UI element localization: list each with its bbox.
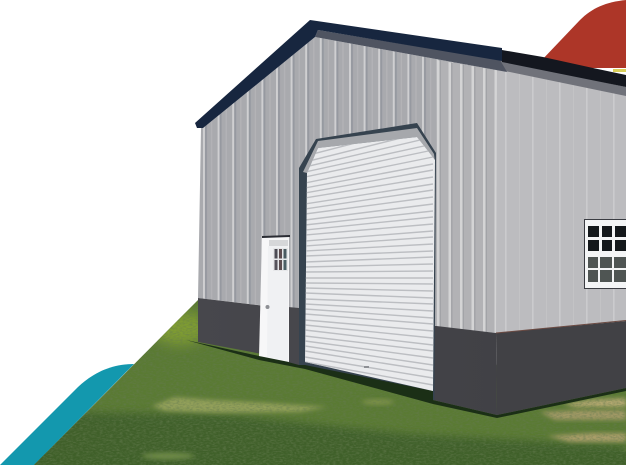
gable soffit shadow bbox=[315, 30, 507, 72]
eave black band bbox=[502, 50, 626, 87]
door transom bbox=[269, 240, 288, 246]
rolling door frame bbox=[299, 123, 436, 400]
foliage speck bbox=[613, 69, 626, 72]
upper sash panes bbox=[588, 226, 626, 251]
wainscot gable bbox=[198, 298, 497, 415]
building bbox=[195, 20, 626, 415]
lower sash panes bbox=[588, 257, 626, 282]
bright grass patch bbox=[152, 311, 208, 345]
red accent shape bbox=[540, 0, 626, 68]
door head shadow bbox=[262, 235, 290, 238]
door slats bbox=[305, 139, 433, 386]
shaded foreground bbox=[30, 412, 626, 465]
grass texture bbox=[30, 290, 626, 465]
door knob bbox=[266, 305, 270, 309]
ground shadow under building bbox=[186, 340, 626, 418]
bare ground patch middle bbox=[540, 410, 626, 420]
lawn bbox=[30, 290, 626, 465]
bare ground patch lower bbox=[547, 433, 626, 442]
sunlit patch right bbox=[362, 399, 394, 405]
wainscot side bbox=[496, 321, 626, 415]
door panel bbox=[267, 246, 288, 361]
door window bbox=[273, 248, 288, 271]
door handle bbox=[364, 366, 369, 368]
door frame bbox=[259, 236, 289, 362]
wainscot by door bbox=[288, 307, 299, 365]
gable wall bbox=[198, 37, 507, 333]
shaded foreground base bbox=[30, 452, 626, 465]
bare ground patch top bbox=[563, 398, 626, 407]
rolling door bbox=[305, 110, 435, 391]
side wall bbox=[496, 66, 626, 333]
door header bbox=[303, 128, 435, 173]
teal accent shape bbox=[0, 364, 134, 465]
side window bbox=[584, 219, 626, 289]
walk door bbox=[259, 235, 290, 362]
near corner ribs bbox=[436, 60, 507, 333]
wall shadow under eave bbox=[500, 60, 626, 96]
wainscot trim line bbox=[496, 320, 626, 333]
sunlit patch low bbox=[142, 452, 194, 460]
sunlit patch bbox=[152, 397, 327, 413]
gable roof trim bbox=[195, 20, 502, 128]
